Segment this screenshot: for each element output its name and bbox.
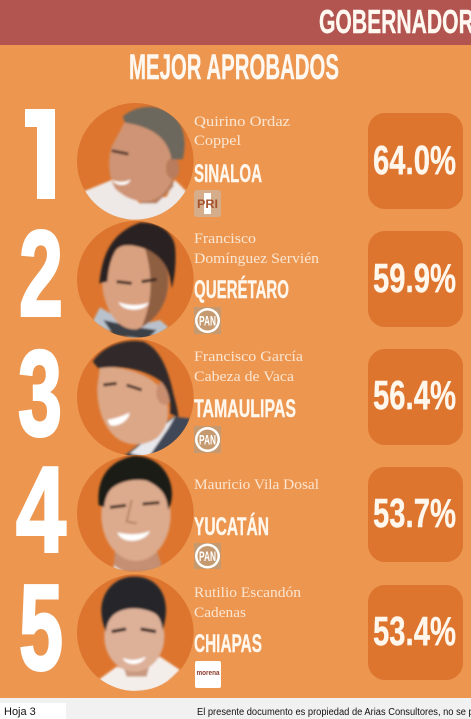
logo: PAN: PAN bbox=[199, 312, 216, 328]
name: Francisco Domínguez Servién bbox=[194, 231, 320, 267]
score box: 59.9% bbox=[368, 231, 463, 327]
footer bar: Hoja 3 bbox=[4, 706, 36, 718]
logo: Morena: morena bbox=[196, 668, 220, 677]
state: Tamaulipas: TAMAULIPAS bbox=[194, 395, 296, 423]
state: Querétaro: QUERÉTARO bbox=[194, 275, 289, 304]
score box: 53.7% bbox=[368, 467, 463, 562]
name: Quirino Ordaz Coppel: Quirino Ordaz bbox=[194, 114, 291, 130]
name: Francisco Domínguez Servién: Domínguez Servién bbox=[194, 251, 320, 267]
name: Quirino Ordaz Coppel bbox=[194, 114, 291, 149]
rank 4: 4 bbox=[16, 442, 66, 578]
rank 1: 1 bbox=[18, 88, 62, 224]
rank 2: 2 bbox=[19, 206, 63, 342]
rank 5: 5 bbox=[19, 560, 63, 696]
state: Sinaloa: SINALOA bbox=[194, 160, 262, 188]
name: Rutilio Escandón Cadenas: Cadenas bbox=[194, 605, 246, 621]
score box: 56.4% bbox=[368, 349, 463, 445]
portrait: Rutilio Escandón Cadenas bbox=[77, 574, 194, 693]
score box: 53.4% bbox=[368, 585, 463, 680]
logo: PAN bbox=[194, 307, 221, 334]
footer bar bbox=[0, 698, 471, 719]
name: Francisco Domínguez Servién: Francisco bbox=[194, 231, 256, 247]
name: Rutilio Escandón Cadenas: Rutilio Escandón bbox=[194, 585, 302, 601]
score box: 64.0% bbox=[368, 113, 463, 209]
portrait: Mauricio Vila Dosal bbox=[77, 455, 194, 573]
logo: PRI: PRI bbox=[197, 197, 218, 211]
name: Rutilio Escandón Cadenas bbox=[194, 585, 302, 621]
portrait: Francisco Domínguez Servién bbox=[77, 221, 194, 339]
state: Chiapas: CHIAPAS bbox=[194, 630, 262, 658]
header band bbox=[0, 0, 471, 45]
logo: PRI bbox=[194, 190, 221, 217]
name: Francisco García Cabeza de Vaca: Cabeza de Vaca bbox=[194, 369, 295, 385]
portrait: Quirino Ordaz Coppel bbox=[77, 103, 194, 223]
rank 3: 3 bbox=[18, 325, 62, 461]
logo: PAN bbox=[194, 543, 221, 569]
portrait: Francisco García Cabeza de Vaca bbox=[77, 339, 194, 457]
name: Mauricio Vila Dosal: Mauricio Vila Dosal bbox=[194, 477, 319, 493]
rank 1 bbox=[25, 109, 55, 199]
name: Francisco García Cabeza de Vaca: Francisco García bbox=[194, 349, 304, 365]
logo: PAN bbox=[194, 426, 221, 453]
name: Francisco García Cabeza de Vaca bbox=[194, 349, 304, 385]
name: Quirino Ordaz Coppel: Coppel bbox=[194, 133, 241, 149]
logo: Morena bbox=[195, 661, 221, 688]
logo: PAN: PAN bbox=[199, 432, 216, 448]
logo: PAN: PAN bbox=[199, 548, 216, 564]
state: Yucatán: YUCATÁN bbox=[194, 512, 269, 541]
